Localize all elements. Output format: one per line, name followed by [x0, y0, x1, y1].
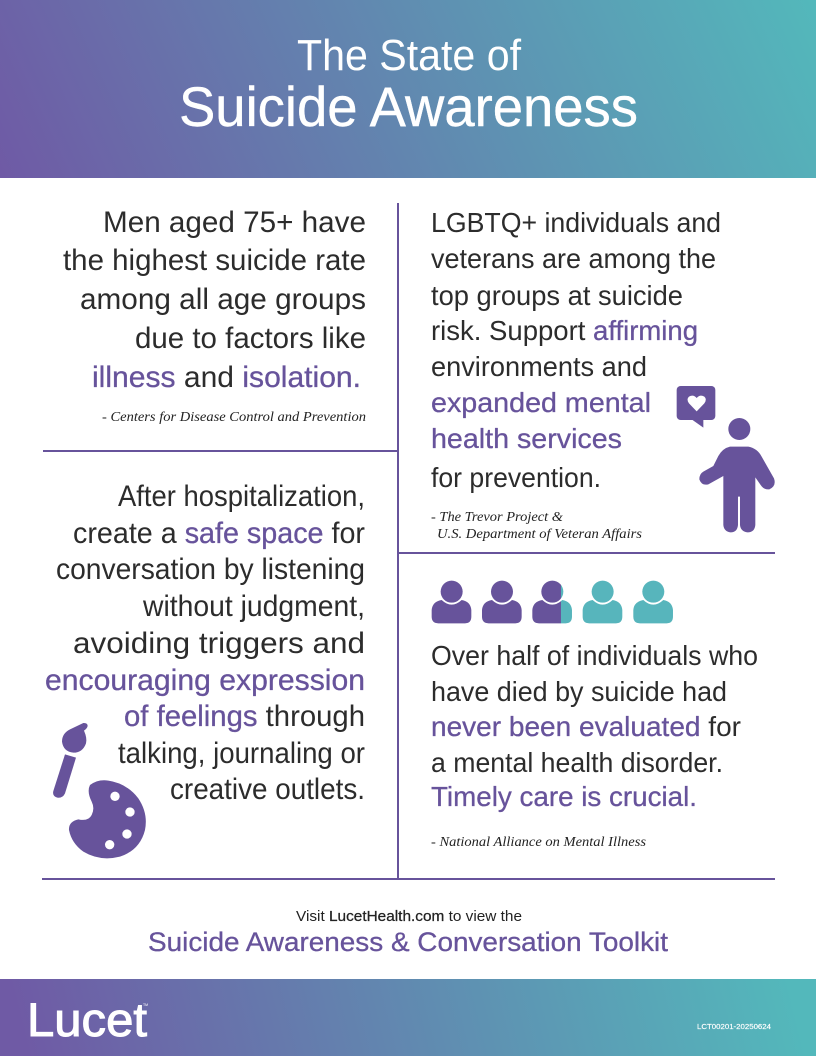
title line 2: Suicide Awareness [179, 75, 638, 138]
panel: never evaluated statistic: have died by suicide had [431, 676, 727, 707]
panel: LGBTQ+ and veterans: expanded mental [431, 387, 651, 418]
panel: after hospitalization advice: conversation by listening [56, 553, 365, 586]
panel: never evaluated statistic [431, 640, 758, 850]
panel: LGBTQ+ and veterans: for prevention. [431, 462, 601, 493]
source: Trevor Project and VA: U.S. Department of Veteran Affairs [437, 527, 643, 542]
document code: LCT00201-20250624 [697, 1024, 771, 1031]
footer banner [0, 979, 816, 1056]
panel: after hospitalization advice: After hospitalization, [118, 480, 365, 513]
source: CDC: - Centers for Disease Control and Prevention [102, 410, 366, 425]
panel: older men statistic: illness and isolation. [92, 361, 361, 394]
panel: LGBTQ+ and veterans: veterans are among the [431, 243, 716, 274]
panel: never evaluated statistic: a mental health disorder. [431, 747, 723, 778]
panel: older men statistic: the highest suicide rate [63, 244, 366, 277]
panel: older men statistic: among all age groups [80, 283, 366, 316]
source: Trevor Project and VA: - The Trevor Project & [431, 510, 563, 525]
panel: never evaluated statistic: never been evaluated for [431, 711, 741, 742]
panel: LGBTQ+ and veterans: environments and [431, 351, 647, 382]
call to action [148, 909, 669, 957]
panel: LGBTQ+ and veterans [431, 207, 721, 542]
panel: older men statistic [63, 206, 366, 425]
icon: row of five people, half purple half teal [432, 581, 673, 623]
logo: Lucet: Lucet [27, 993, 147, 1046]
panel: older men statistic: Men aged 75+ have [103, 206, 366, 239]
panel: after hospitalization advice: encouraging expression [45, 664, 365, 697]
panel: after hospitalization advice: avoiding triggers and [73, 627, 365, 660]
panel: after hospitalization advice: of feelings through [124, 700, 365, 733]
panel: LGBTQ+ and veterans: LGBTQ+ individuals and [431, 207, 721, 238]
panel: after hospitalization advice: creative outlets. [170, 773, 365, 806]
title line 1: The State of [297, 31, 522, 80]
header banner [0, 0, 816, 178]
panel: after hospitalization advice: create a safe space for [73, 517, 365, 550]
logo: Lucet: TM [143, 1003, 148, 1007]
panel: LGBTQ+ and veterans: top groups at suicide [431, 280, 683, 311]
panel: after hospitalization advice [45, 480, 365, 806]
call to action: Visit LucetHealth.com to view the [296, 909, 522, 925]
panel: after hospitalization advice: talking, journaling or [118, 737, 365, 770]
icon: paintbrush and palette [53, 723, 146, 858]
panel: after hospitalization advice: without judgment, [142, 590, 365, 623]
source: Trevor Project and VA [431, 510, 643, 542]
panel: LGBTQ+ and veterans: risk. Support affirming [431, 315, 698, 346]
source: NAMI: - National Alliance on Mental Illness [431, 835, 647, 850]
panel: never evaluated statistic: Over half of individuals who [431, 640, 758, 671]
panel: older men statistic: due to factors like [135, 322, 366, 355]
call to action: Suicide Awareness & Conversation Toolkit [148, 927, 669, 957]
panel: LGBTQ+ and veterans: health services [431, 423, 622, 454]
panel: never evaluated statistic: Timely care is crucial. [431, 781, 697, 812]
icon: person with heart speech bubble [677, 386, 775, 532]
